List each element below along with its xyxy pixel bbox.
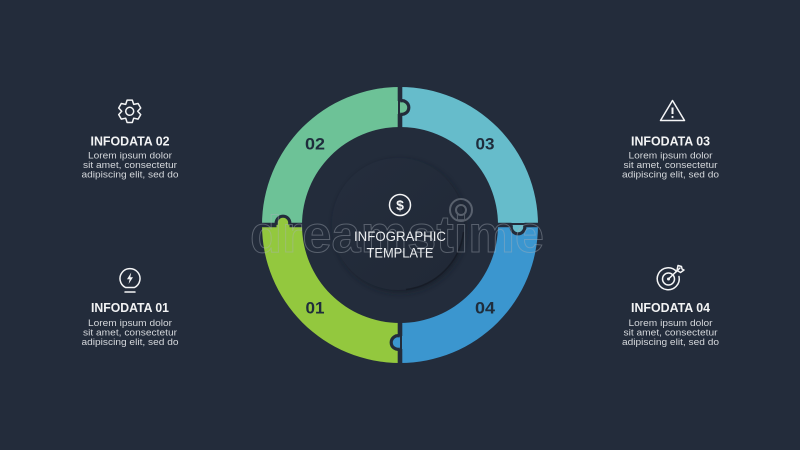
panel: infodata 02 xyxy=(82,100,178,180)
text block: sit amet, consectetur xyxy=(83,328,178,338)
text block: Lorem ipsum dolor xyxy=(628,318,713,329)
text block: Lorem ipsum dolor xyxy=(88,318,173,329)
panel: infodata 03 xyxy=(622,100,719,180)
text block: adipiscing elit, sed do xyxy=(622,170,719,180)
icon: light bulb xyxy=(120,269,140,292)
center title: TEMPLATE xyxy=(366,244,434,260)
segment 03 xyxy=(400,87,538,234)
icon: gear xyxy=(119,100,141,122)
watermark: dreamstime xyxy=(250,206,544,264)
center title xyxy=(354,228,446,260)
text block: sit amet, consectetur xyxy=(624,160,718,171)
segment 01 xyxy=(262,225,400,363)
text block xyxy=(622,318,719,348)
icon: target xyxy=(657,266,684,290)
text block: adipiscing elit, sed do xyxy=(82,170,178,180)
icon: dollar: $ xyxy=(396,197,404,213)
heading: INFODATA 03 xyxy=(631,134,710,148)
center title: INFOGRAPHIC xyxy=(354,228,446,244)
text block: sit amet, consectetur xyxy=(624,328,718,338)
segment 04 xyxy=(391,225,538,363)
text block xyxy=(82,318,178,348)
text block: sit amet, consectetur xyxy=(83,160,178,171)
text block: adipiscing elit, sed do xyxy=(622,337,719,348)
number 02: 02 xyxy=(305,136,325,154)
heading: INFODATA 01 xyxy=(91,301,169,315)
number 01: 01 xyxy=(306,300,324,318)
segment 01 knob xyxy=(276,216,290,227)
text block xyxy=(82,150,178,180)
center label xyxy=(354,194,446,260)
panel: infodata 04 xyxy=(622,266,719,348)
heading: INFODATA 02 xyxy=(90,134,170,148)
text block xyxy=(622,150,719,180)
segment 02 xyxy=(262,87,409,225)
center disc xyxy=(332,158,466,292)
heading: INFODATA 04 xyxy=(631,301,710,315)
number 03: 03 xyxy=(476,136,494,154)
panel: infodata 01 xyxy=(82,269,178,348)
ring diagram xyxy=(260,84,540,366)
text block: adipiscing elit, sed do xyxy=(82,337,178,348)
text block: Lorem ipsum dolor xyxy=(628,150,713,162)
text block: Lorem ipsum dolor xyxy=(88,150,173,162)
icon: warning triangle xyxy=(660,100,684,120)
number 04: 04 xyxy=(475,300,496,318)
